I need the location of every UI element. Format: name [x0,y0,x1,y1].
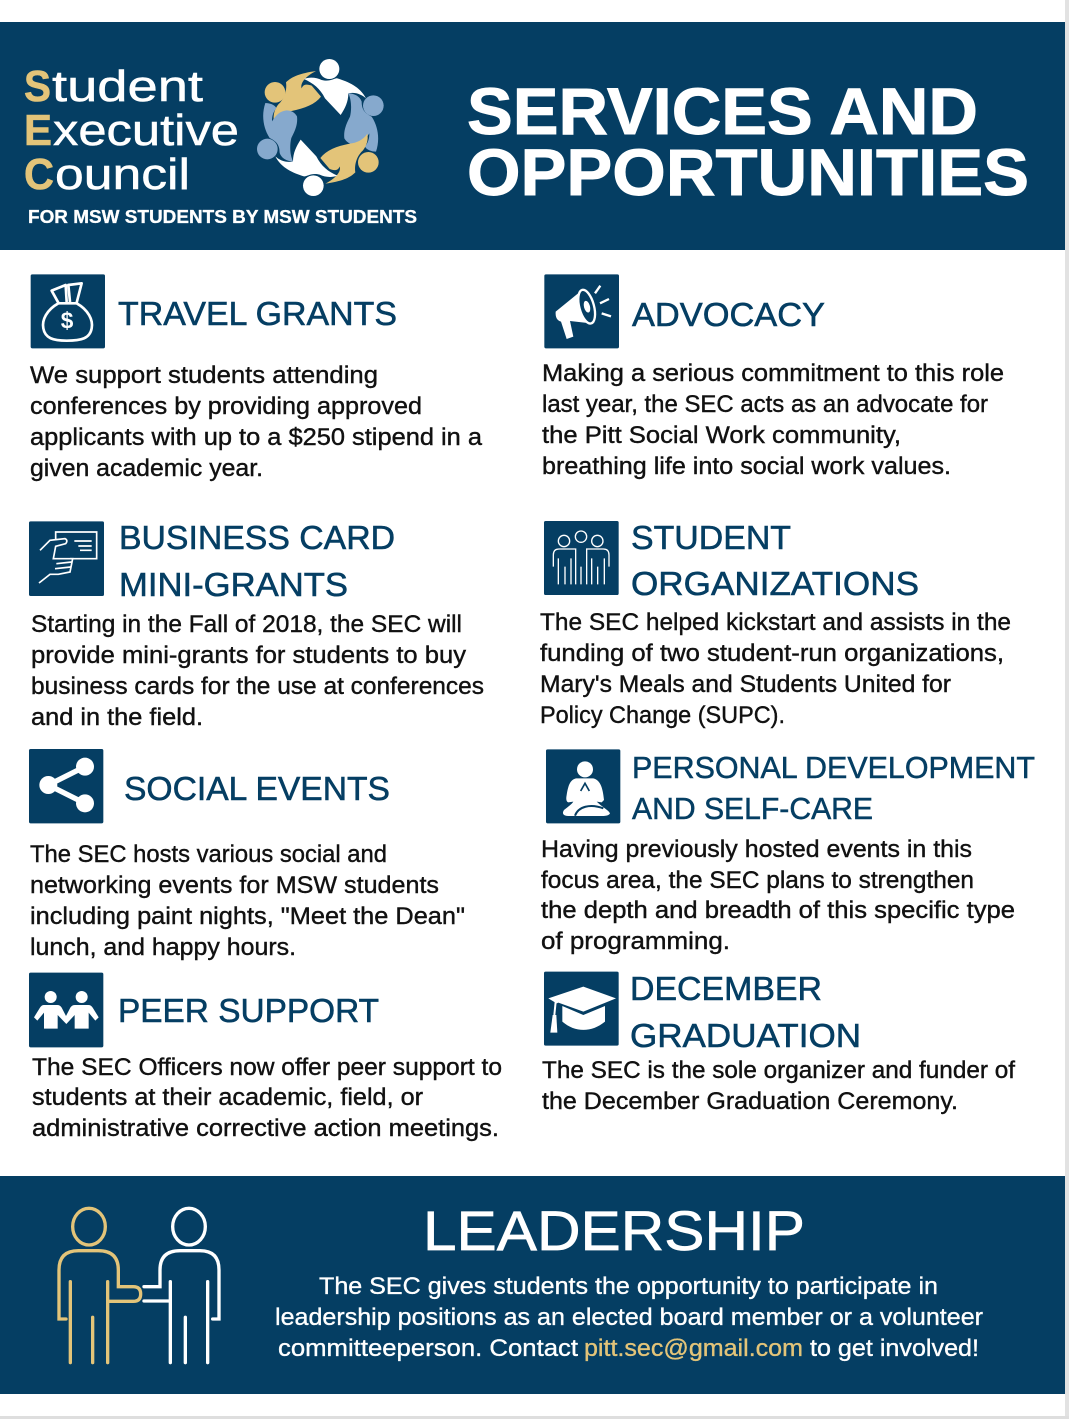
logo wordmark: E [24,106,52,155]
panel: travel grants [30,274,483,482]
text block: networking events for MSW students [30,872,439,899]
text block: lunch, and happy hours. [30,934,296,961]
panel: leadership [0,1176,1065,1394]
panel: business card mini-grants [29,519,484,731]
text block: breathing life into social work values. [542,453,951,480]
logo wordmark: xecutive [53,106,239,155]
text block: The SEC is the sole organizer and funder of [542,1057,1015,1084]
text block: the Pitt Social Work community, [542,422,901,449]
text block: of programming. [541,928,730,955]
text block: including paint nights, "Meet the Dean" [30,903,465,930]
heading: TRAVEL GRANTS [118,295,397,332]
text block: Starting in the Fall of 2018, the SEC will [31,611,462,638]
text block: and in the field. [31,704,203,731]
icon: megaphone [544,274,619,348]
text block [30,362,483,482]
text block: committeeperson. Contact [278,1335,578,1362]
heading: AND SELF-CARE [632,791,873,826]
text block: to get involved! [810,1335,979,1362]
heading: GRADUATION [630,1017,861,1054]
heading: MINI-GRANTS [119,566,348,603]
text block: provide mini-grants for students to buy [31,642,466,669]
logo wordmark: C [24,150,54,199]
text block: students at their academic, field, or [32,1084,423,1111]
logo wordmark: ouncil [55,150,190,199]
text block [32,1054,502,1142]
text block [541,836,1015,955]
text block: the December Graduation Ceremony. [542,1088,958,1115]
icon: three people group [544,521,619,595]
icon: graduation cap [544,972,619,1046]
panel: student organizations [540,519,1011,729]
heading: SOCIAL EVENTS [124,770,390,807]
text block: conferences by providing approved [30,393,422,420]
text block: Having previously hosted events in this [541,836,972,863]
icon: two people shaking hands [59,1208,219,1363]
title: OPPORTUNITIES [467,135,1029,209]
text block: Mary's Meals and Students United for [540,671,951,698]
icon: two people holding hands [29,973,103,1047]
panel: personal development and self-care [541,749,1035,955]
heading [630,970,861,1054]
text block: The SEC gives students the opportunity to participate in [319,1273,938,1300]
heading: ADVOCACY [632,296,825,333]
header banner [0,22,1065,250]
text block: business cards for the use at conferences [31,673,484,700]
heading [632,750,1035,826]
heading: PERSONAL DEVELOPMENT [632,750,1035,785]
text block [542,1057,1015,1115]
text block [542,360,1004,480]
text block: focus area, the SEC plans to strengthen [541,867,974,894]
heading: LEADERSHIP [423,1199,805,1262]
panel: advocacy [542,274,1004,480]
text block: The SEC helped kickstart and assists in the [540,609,1011,636]
panel: social events [29,749,465,961]
text block: The SEC Officers now offer peer support to [32,1054,502,1081]
icon: meditating figure [546,749,620,823]
text block: applicants with up to a $250 stipend in a [30,424,483,451]
heading: DECEMBER [630,970,822,1007]
icon: share nodes [29,749,103,823]
heading [119,519,395,603]
heading: BUSINESS CARD [119,519,395,556]
text block: administrative corrective action meetings. [32,1115,499,1142]
text block: Policy Change (SUPC). [540,702,785,729]
heading: STUDENT [631,519,791,556]
text block: the depth and breadth of this specific type [541,897,1015,924]
text block [540,609,1011,729]
logo wordmark: tudent [52,62,203,111]
panel: peer support [29,973,502,1142]
text block: funding of two student-run organizations, [540,640,1004,667]
heading [631,519,919,602]
tagline: FOR MSW STUDENTS BY MSW STUDENTS [28,207,417,227]
heading: PEER SUPPORT [118,992,379,1029]
text block [275,1273,983,1362]
text block: We support students attending [30,362,378,389]
title [467,74,1029,209]
text block [30,841,465,961]
text block: Making a serious commitment to this role [542,360,1004,387]
icon: money bag [31,274,105,348]
icon: money bag: $ [61,307,74,333]
icon: council logo of linked figures [257,59,384,196]
text block: last year, the SEC acts as an advocate for [542,391,988,418]
logo wordmark [24,62,239,199]
text block: The SEC hosts various social and [30,841,387,868]
text block: leadership positions as an elected board member or a volunteer [275,1304,983,1331]
text block: given academic year. [30,455,263,482]
text block: pitt.sec@gmail.com [584,1335,803,1362]
title: SERVICES AND [467,74,978,148]
icon: hand holding card [29,521,104,596]
text block [31,611,484,731]
heading: ORGANIZATIONS [631,565,919,602]
panel: december graduation [542,970,1015,1115]
logo wordmark: S [24,62,51,111]
